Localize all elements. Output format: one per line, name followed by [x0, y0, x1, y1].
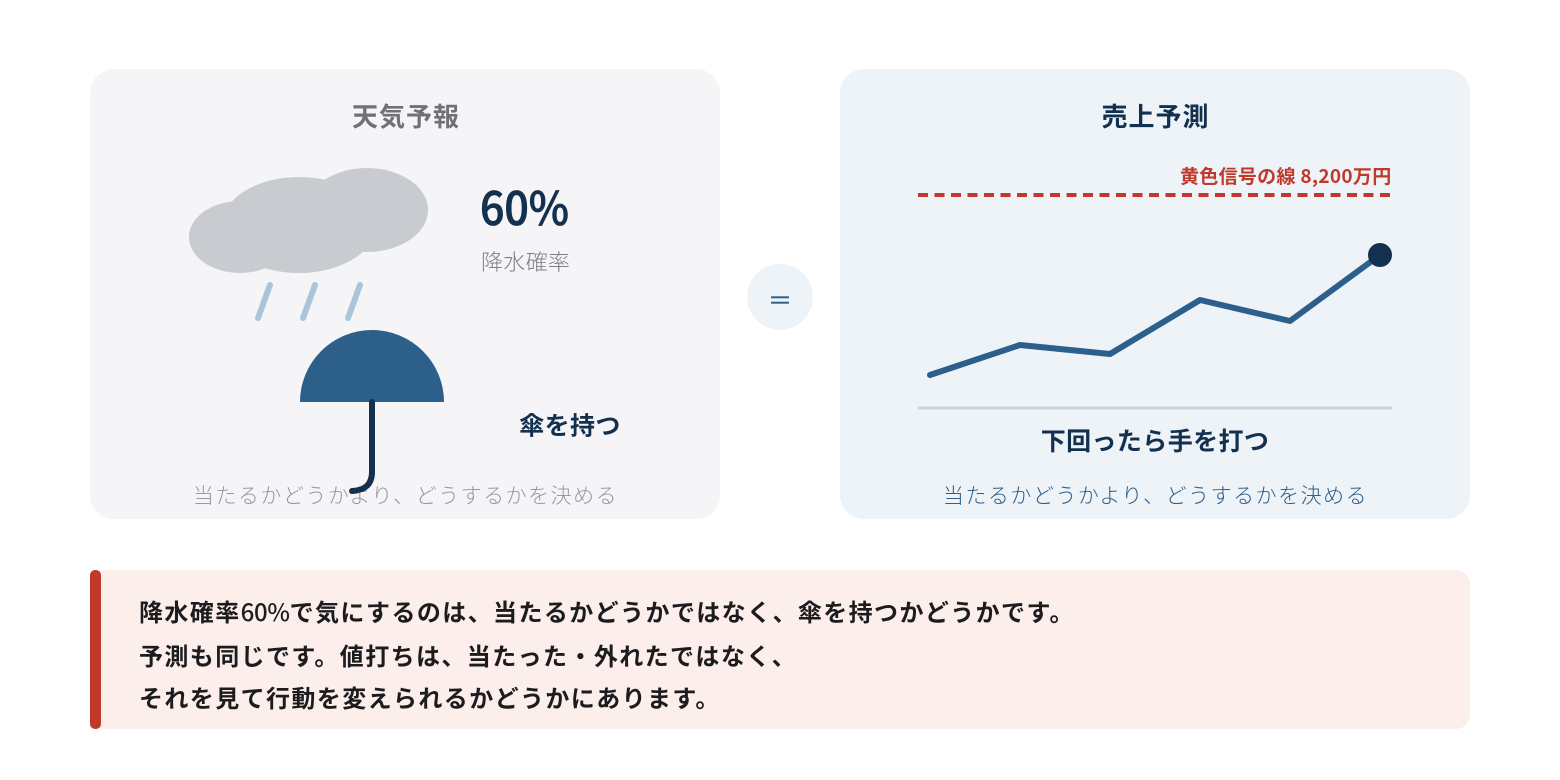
callout accent bar: [90, 570, 101, 729]
icon: rain cloud: [189, 168, 428, 273]
connector: equals sign: [747, 264, 813, 330]
callout text: [139, 593, 1075, 714]
stat: 60 percent: 60%: [480, 173, 569, 239]
heading: sales forecast: 売上予測: [1101, 97, 1210, 134]
heading: weather forecast: 天気予報: [352, 97, 460, 134]
callout text: 予測も同じです。値打ちは、当たった・外れたではなく、: [139, 637, 797, 672]
callout: conclusion: [90, 570, 1470, 729]
panel: weather forecast: [90, 69, 720, 519]
caption: sales panel: 当たるかどうかより、どうするかを決める: [943, 480, 1368, 510]
threshold dashed line: [918, 193, 1390, 197]
icon: umbrella: [300, 330, 444, 491]
threshold label: 黄色信号の線 8,200万円: [1180, 162, 1392, 189]
line chart: sales trend: [930, 255, 1380, 375]
panel: sales forecast: [840, 69, 1470, 519]
label: take an umbrella: 傘を持つ: [519, 406, 621, 442]
caption: weather panel: 当たるかどうかより、どうするかを決める: [193, 480, 618, 510]
label: precipitation probability: 降水確率: [481, 245, 570, 277]
callout text: 降水確率60%で気にするのは、当たるかどうかではなく、傘を持つかどうかです。: [139, 593, 1075, 628]
chart end point: [1368, 243, 1392, 267]
chart axis: [918, 406, 1392, 410]
icon: rain drops: [258, 285, 360, 318]
label: act if below: 下回ったら手を打つ: [1041, 422, 1269, 458]
callout text: それを見て行動を変えられるかどうかにあります。: [139, 679, 721, 714]
